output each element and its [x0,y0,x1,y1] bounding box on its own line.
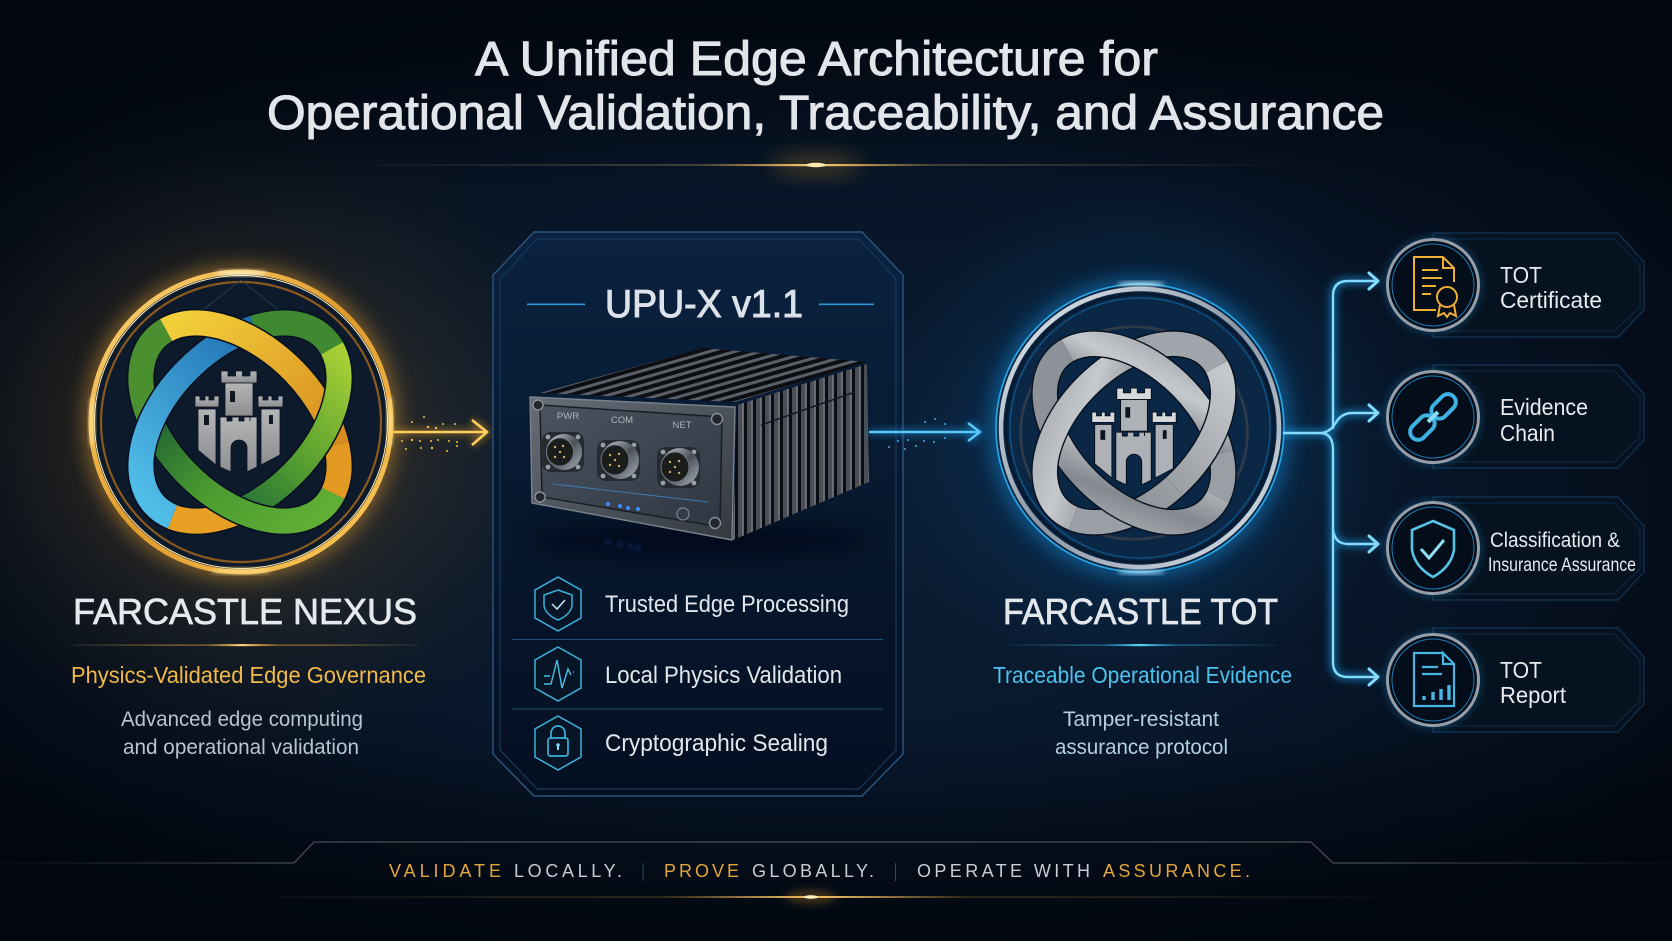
feature: Cryptographic Sealing [535,716,828,770]
output: Evidence Chain [1384,365,1644,468]
title divider with gold flare [330,154,1302,176]
icon: report [1414,653,1454,706]
screws [533,400,722,528]
panel: Farcastle TOT [991,279,1292,759]
icon: chain links [1407,391,1459,443]
output: TOT Certificate: TOT [1500,262,1542,288]
tagline: VALIDATE [389,861,501,881]
connector: branching arrows [1284,273,1378,685]
icon: silver castle [1092,388,1176,485]
description [121,708,363,759]
labels on ports: PWR [557,411,579,422]
feature: Cryptographic Sealing: Cryptographic Sealing [605,730,828,757]
icon: shield check [1412,521,1454,577]
labels on ports: NET [672,420,692,431]
output: TOT Report [1384,628,1644,732]
feature: Trusted Edge Processing [535,577,849,631]
feature: Local Physics Validation [535,647,842,701]
labels on ports: COM [611,415,633,426]
icon: castle [195,371,283,472]
heading: FARCASTLE NEXUS: FARCASTLE NEXUS [73,591,417,632]
divider [1003,644,1277,646]
title [267,33,1384,140]
description: assurance protocol [1055,736,1228,759]
arrow: Nexus to UPU-X [392,416,487,452]
output: TOT Certificate: Certificate [1500,287,1602,313]
description: Advanced edge computing [121,708,363,731]
panel: Farcastle Nexus [71,266,426,759]
feature: Trusted Edge Processing: Trusted Edge Processing [605,591,849,618]
icon: interwoven silver rings [1011,311,1256,556]
output: Classification and Insurance Assurance: Insurance Assurance [1488,555,1636,576]
output: TOT Certificate [1384,233,1644,337]
panel: UPU-X v1.1 [493,232,903,796]
title: Operational Validation, Traceability, and Assurance [267,87,1384,140]
heading: UPU-X v1.1: UPU-X v1.1 [605,283,803,326]
feature list [512,577,883,770]
subheading: Traceable Operational Evidence [993,662,1292,688]
output: TOT Report: TOT [1500,657,1542,683]
tagline: PROVE [664,861,739,881]
output: Evidence Chain: Chain [1500,420,1555,446]
output: Evidence Chain: Evidence [1500,394,1588,420]
heading: FARCASTLE TOT: FARCASTLE TOT [1003,591,1278,632]
description [1055,708,1228,759]
footer gold flare [280,890,1380,904]
connectors [542,432,700,488]
icon: Nexus emblem [85,266,397,578]
arrow: UPU-X to TOT [869,418,980,450]
tagline: OPERATE WITH [917,861,1090,881]
description: and operational validation [123,736,359,759]
divider [73,644,420,646]
status LEDs [606,502,640,511]
output: TOT Report: Report [1500,682,1567,708]
tagline: GLOBALLY. [752,861,874,881]
tagline: ASSURANCE. [1103,861,1250,881]
device: edge hardware unit [530,348,870,558]
title: A Unified Edge Architecture for [475,33,1158,86]
icon: TOT emblem [991,279,1289,577]
output: Classification and Insurance Assurance [1384,497,1644,600]
tagline: LOCALLY. [514,861,622,881]
icon: certificate [1414,257,1457,317]
output: Classification and Insurance Assurance: Classification & [1490,529,1620,552]
labels on ports [557,411,692,431]
feature: Local Physics Validation: Local Physics Validation [605,662,842,689]
description: Tamper-resistant [1063,708,1219,731]
icon: interwoven coloured rings [104,287,375,558]
subheading: Physics-Validated Edge Governance [71,662,426,688]
tagline [389,861,1250,881]
footer banner [0,842,1672,904]
